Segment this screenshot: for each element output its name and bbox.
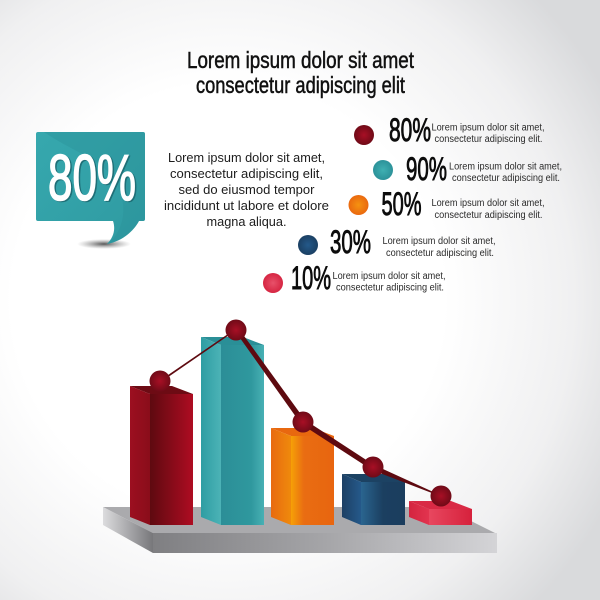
legend item: 10% [263, 260, 446, 296]
legend item: 90% [373, 151, 562, 187]
intro text block: magna aliqua. [206, 215, 286, 229]
title [187, 47, 414, 98]
legend item: 10%: 10% [291, 260, 331, 296]
intro text block: Lorem ipsum dolor sit amet, [168, 151, 325, 165]
bar: orange [271, 428, 334, 525]
legend item: 50% [348, 186, 544, 222]
callout: 80% speech bubble: 80% [50, 142, 138, 215]
intro text block [164, 151, 329, 229]
legend item: 50%: 50% [382, 186, 422, 222]
intro text block: incididunt ut labore et dolore [164, 199, 329, 213]
legend item: 10%: Lorem ipsum dolor sit amet, [332, 271, 446, 282]
legend item: 90%: 90% [406, 151, 447, 187]
legend item: 30% [298, 224, 496, 260]
legend item: 90%: consectetur adipiscing elit. [452, 173, 560, 184]
legend item: 30%: Lorem ipsum dolor sit amet, [382, 236, 496, 247]
legend item: 80% [354, 112, 544, 148]
bar: navy [342, 474, 405, 525]
title: Lorem ipsum dolor sit amet [187, 47, 414, 73]
legend item: 30%: consectetur adipiscing elit. [386, 248, 494, 259]
legend item: 90%: Lorem ipsum dolor sit amet, [449, 162, 562, 172]
bar: crimson [409, 501, 472, 525]
trend line [160, 328, 441, 496]
bar chart [103, 320, 497, 553]
legend item: 80%: Lorem ipsum dolor sit amet, [432, 122, 544, 134]
bar: red [130, 386, 193, 525]
legend item: 50%: Lorem ipsum dolor sit amet, [432, 198, 544, 209]
trend markers [150, 320, 452, 506]
intro text block: sed do eiusmod tempor [178, 183, 314, 197]
intro text block: consectetur adipiscing elit, [170, 167, 323, 181]
platform [103, 507, 497, 553]
callout: 80% speech bubble [36, 132, 145, 249]
legend item: 80%: consectetur adipiscing elit. [434, 134, 542, 145]
legend item: 10%: consectetur adipiscing elit. [336, 282, 444, 294]
title: consectetur adipiscing elit [196, 72, 405, 98]
legend item: 30%: 30% [330, 224, 371, 260]
callout: 80% speech bubble: 80% [48, 141, 136, 214]
legend item: 50%: consectetur adipiscing elit. [434, 210, 542, 221]
bar: teal [201, 337, 264, 525]
legend item: 80%: 80% [389, 112, 431, 148]
